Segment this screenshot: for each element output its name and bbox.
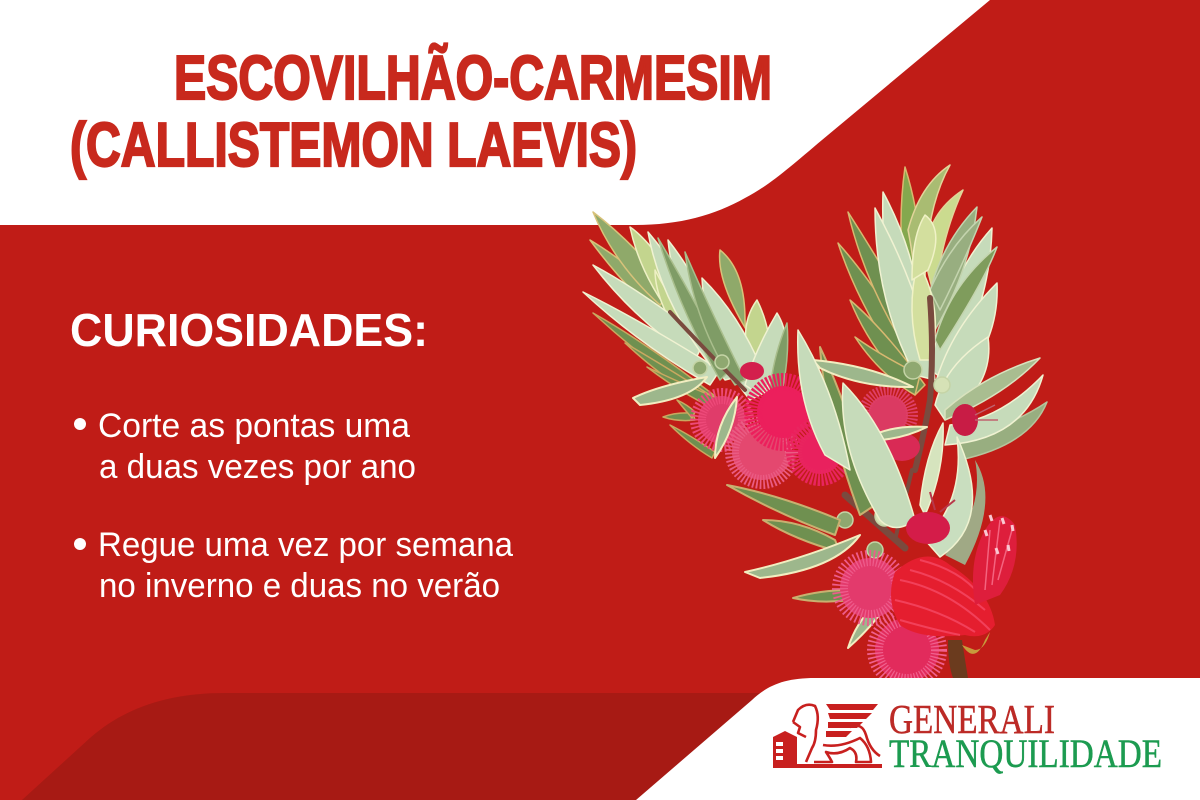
illustration: callistemon branch: [583, 165, 1047, 682]
back leaves: left sprig: [583, 212, 788, 458]
bullet 2: no inverno e duas no verão: [99, 567, 500, 605]
buds: red top blooms: [740, 362, 998, 436]
bullet 1: a duas vezes por ano: [99, 448, 416, 486]
bullet 1: Corte as pontas uma: [98, 407, 410, 445]
title: [70, 44, 772, 180]
heading: curiosidades: CURIOSIDADES:: [70, 304, 428, 356]
stems: [670, 298, 932, 548]
flower: pink cluster, middle right: [864, 391, 920, 461]
back leaves: right sprig: [838, 165, 1047, 460]
dark red bottom band: [22, 693, 770, 800]
white top banner: [0, 0, 990, 225]
title: ESCOVILHÃO-CARMESIM: [174, 44, 772, 113]
bullet 2: [74, 526, 513, 605]
front leaves: [633, 330, 985, 648]
logo text: generali: GENERALI: [889, 696, 1055, 742]
white bottom logo panel: [636, 678, 1200, 800]
bullet list: [74, 407, 513, 605]
seed capsules: [693, 355, 950, 558]
bullet 1: [74, 407, 416, 486]
flower: pink pompom cluster, left: [698, 382, 846, 482]
bullet 2: Regue uma vez por semana: [98, 526, 513, 564]
title: (CALLISTEMON LAEVIS): [70, 111, 637, 180]
flower: bottom pink and red blooms: [840, 492, 1017, 682]
logo icon: winged lion with book: [773, 704, 882, 768]
logo: generali tranquilidade: [773, 696, 1162, 776]
